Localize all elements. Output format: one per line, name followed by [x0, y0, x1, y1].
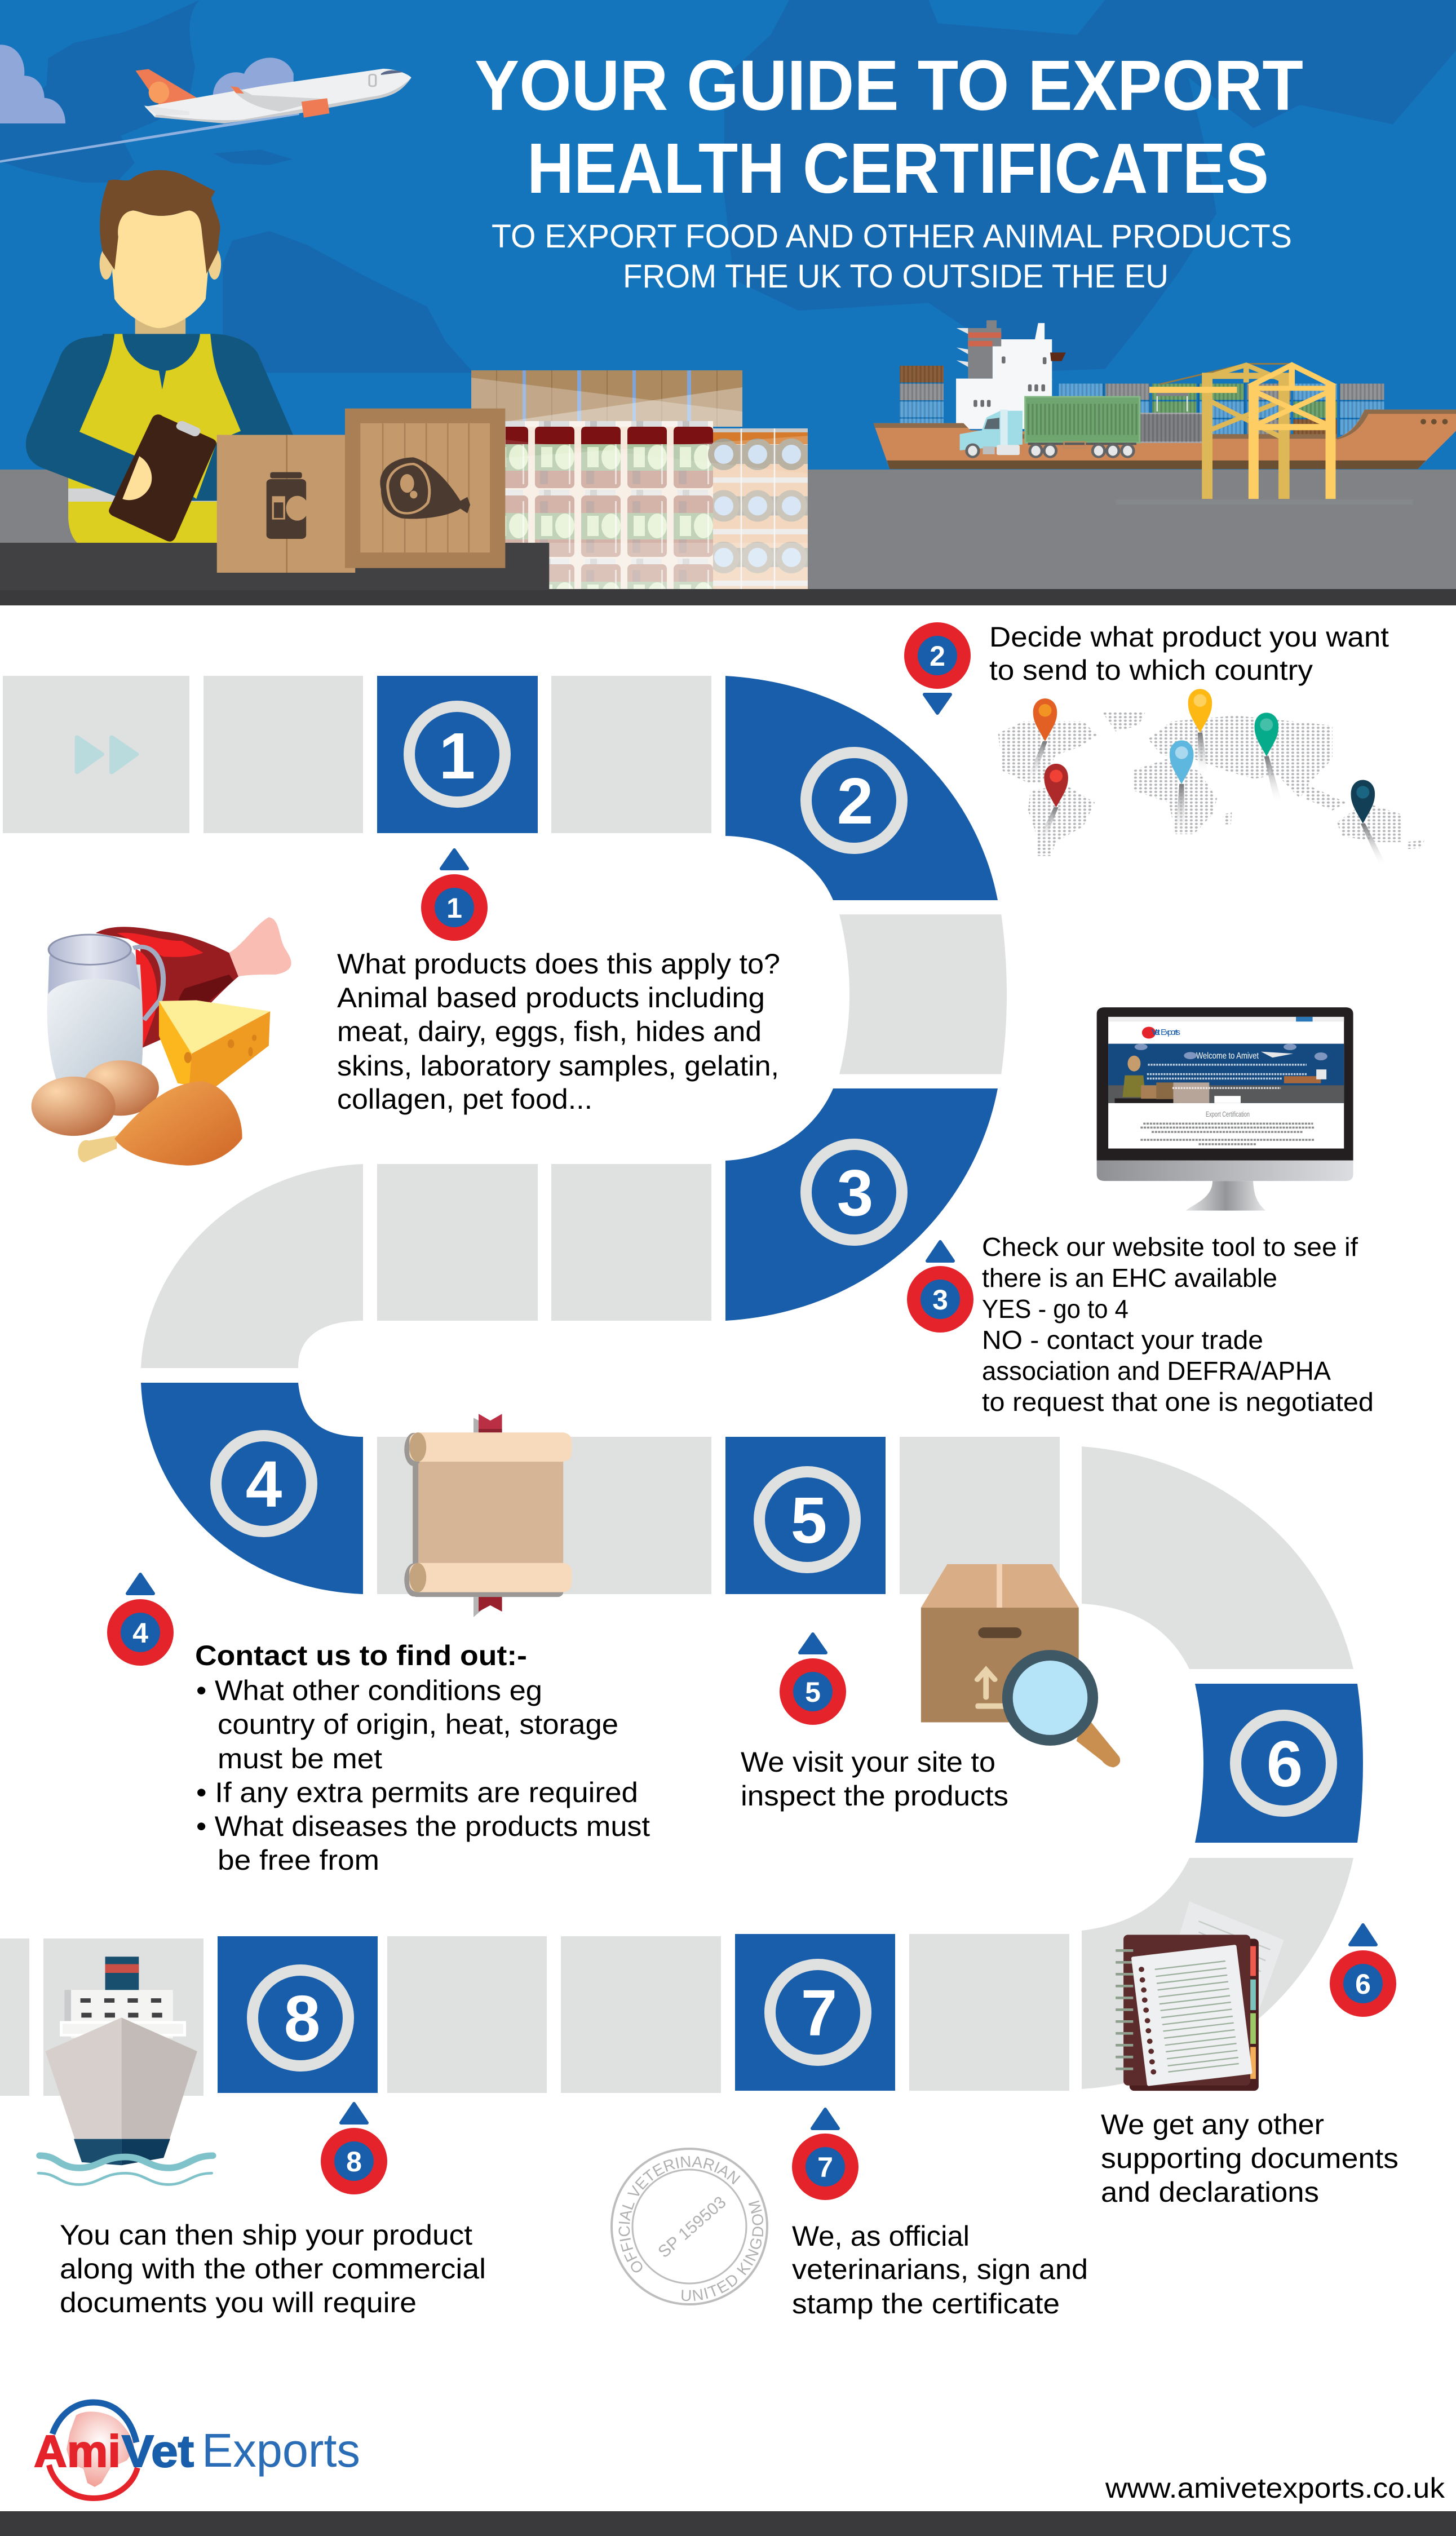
step 6: badge: 6	[1355, 1968, 1371, 2000]
step 3: website on monitor: Vet	[1152, 1028, 1160, 1037]
step 2: text	[989, 621, 1389, 686]
step 1: text	[337, 948, 780, 1115]
step 8: text: along with the other commercial	[60, 2253, 486, 2285]
lower right curve tile	[1082, 1858, 1353, 2089]
world map background	[0, 0, 1456, 373]
step 4: scroll icon	[404, 1414, 572, 1617]
step 7: official veterinarian stamp: OFFICIAL VETERINARIAN	[619, 2156, 741, 2273]
website address: www.amivetexports.co.uk	[1105, 2472, 1445, 2504]
logo globe	[67, 2411, 134, 2487]
map pin: red	[1044, 764, 1068, 807]
tile 5	[725, 1437, 886, 1594]
curve connector tile	[839, 914, 1007, 1074]
step 1: text: Animal based products including	[337, 982, 765, 1013]
step 5: text: inspect the products	[741, 1780, 1008, 1812]
tile 8	[218, 1936, 378, 2093]
tile 1: 1	[439, 719, 475, 793]
snakes and ladders style path	[0, 676, 1363, 2096]
tile 5: 5	[791, 1484, 827, 1557]
step 1: badge: 1	[446, 892, 462, 924]
step 5: text	[741, 1746, 1008, 1812]
counter	[0, 543, 549, 590]
step 8: cruise ship on waves	[38, 1957, 213, 2184]
step 6: text: We get any other	[1101, 2109, 1324, 2140]
map pin: teal	[1351, 780, 1375, 824]
truck with container	[960, 397, 1209, 457]
map pin: green	[1254, 712, 1278, 756]
step 1: badge	[421, 850, 488, 941]
curve tile 4: 4	[246, 1448, 282, 1521]
step 4: badge: 4	[132, 1617, 148, 1649]
step 3: text	[982, 1232, 1374, 1417]
curve tile 4	[141, 1383, 363, 1594]
step 3: website on monitor: Welcome to Amivet	[1196, 1051, 1259, 1061]
clouds	[0, 45, 294, 123]
yellow dock crane	[1116, 364, 1413, 504]
step 2: badge	[904, 622, 971, 713]
curve tile 2	[725, 676, 998, 900]
step 4: badge	[107, 1574, 174, 1666]
step 7: text: We, as official	[792, 2220, 970, 2252]
step 3: website on monitor: Export Certification	[1206, 1110, 1250, 1118]
AmiVet Exports logo: Ami	[34, 2426, 121, 2476]
AmiVet Exports logo: Exports	[202, 2424, 360, 2477]
step 5: badge: 5	[805, 1676, 821, 1708]
step 8: text	[60, 2219, 486, 2318]
step 5: badge	[780, 1634, 846, 1725]
curve tile 3	[725, 1088, 998, 1321]
step 4: text: • What other conditions eg	[196, 1675, 542, 1706]
step 4: text: • If any extra permits are required	[196, 1777, 638, 1808]
step 3: website on monitor	[1097, 1007, 1353, 1211]
crate with ham icon	[345, 409, 505, 568]
jars	[505, 421, 713, 589]
quayside ground	[0, 470, 1456, 590]
step 7: text	[792, 2220, 1088, 2320]
step 8: text: documents you will require	[60, 2287, 417, 2318]
row 1 tiles	[3, 676, 711, 833]
step 4: text: be free from	[218, 1844, 379, 1876]
crate with jar icon	[217, 435, 355, 573]
step 8: text: You can then ship your product	[60, 2219, 472, 2251]
step 4: text: Contact us to find out:-	[195, 1640, 527, 1671]
airplane with contrail	[0, 69, 411, 163]
logo swoosh arcs	[49, 2402, 138, 2498]
AmiVet Exports logo	[34, 2402, 360, 2498]
subtitle: FROM THE UK TO OUTSIDE THE EU	[623, 258, 1169, 295]
step 2: badge: 2	[930, 640, 945, 672]
step 1: food illustration	[32, 917, 291, 1166]
step 6: text	[1101, 2109, 1399, 2208]
footer band	[0, 2511, 1456, 2536]
pallet of wrapped jars and cans	[471, 370, 808, 589]
step 7: official veterinarian stamp: SP 159503	[654, 2193, 730, 2261]
title: HEALTH CERTIFICATES	[527, 129, 1269, 208]
step 3: text: Check our website tool to see if	[982, 1232, 1358, 1262]
step 3: badge	[907, 1242, 973, 1333]
step 7: text: stamp the certificate	[792, 2288, 1060, 2320]
step 3: text: NO - contact your trade	[982, 1325, 1263, 1355]
step 4: text: country of origin, heat, storage	[218, 1709, 618, 1740]
AmiVet Exports logo: Vet	[122, 2426, 194, 2476]
step 8: badge: 8	[346, 2146, 362, 2177]
clear stretch wrap	[471, 378, 808, 589]
step 6: text: and declarations	[1101, 2176, 1319, 2208]
step 3: text: association and DEFRA/APHA	[982, 1356, 1331, 1386]
subtitle: TO EXPORT FOOD AND OTHER ANIMAL PRODUCTS	[492, 218, 1292, 255]
step 7: official veterinarian stamp: UNITED KINGDOM	[681, 2201, 763, 2301]
row 5 tiles	[0, 1934, 1069, 2096]
map pin: yellow	[1188, 689, 1212, 733]
inspector figure with clipboard	[0, 170, 293, 543]
step 7: official veterinarian stamp	[610, 2148, 768, 2305]
step 3: text: to request that one is negotiated	[982, 1387, 1374, 1417]
stacked cartons on top of pallet	[471, 370, 742, 427]
cans	[711, 428, 808, 589]
cargo ship	[874, 320, 1456, 469]
step 1: text: collagen, pet food...	[337, 1083, 592, 1115]
step 8: badge	[321, 2104, 387, 2194]
step 3: text: there is an EHC available	[982, 1263, 1277, 1293]
step 7: badge: 7	[817, 2152, 833, 2183]
step 7: text: veterinarians, sign and	[792, 2254, 1088, 2285]
upper right curve tile	[1082, 1446, 1353, 1669]
row 3 tiles and curve	[141, 1164, 711, 1368]
curve tile 3: 3	[837, 1156, 873, 1229]
step 4: text: • What diseases the products must	[196, 1811, 650, 1842]
curve tile 2: 2	[837, 764, 873, 838]
step 2: text: Decide what product you want	[989, 621, 1389, 653]
tile 6: 6	[1267, 1727, 1303, 1800]
step 1: text: What products does this apply to?	[337, 948, 780, 980]
tile 6	[1195, 1684, 1363, 1843]
fast forward start icon	[77, 737, 136, 772]
step 4: text	[195, 1640, 650, 1876]
step 1: text: meat, dairy, eggs, fish, hides and	[337, 1016, 762, 1047]
title	[475, 46, 1303, 208]
step 1: text: skins, laboratory samples, gelatin,	[337, 1050, 779, 1082]
step 2: text: to send to which country	[989, 654, 1313, 686]
step 5: cardboard box with magnifier	[921, 1564, 1120, 1767]
step 5: text: We visit your site to	[741, 1746, 995, 1778]
tile 7: 7	[801, 1976, 837, 2050]
header banner	[0, 0, 1456, 605]
step 3: website on monitor: Exports	[1161, 1028, 1180, 1037]
step 3: text: YES - go to 4	[982, 1294, 1128, 1324]
tile 7	[735, 1934, 895, 2091]
step 7: badge	[792, 2109, 858, 2200]
step 4: text: must be met	[218, 1743, 382, 1774]
map pin: light blue	[1170, 740, 1193, 784]
step 6: notebook with loose page	[1116, 1901, 1284, 2091]
title: YOUR GUIDE TO EXPORT	[475, 46, 1303, 125]
tile 8: 8	[284, 1982, 320, 2055]
tile 1	[377, 676, 538, 833]
step 3: website on monitor: Ami	[1143, 1028, 1153, 1037]
subtitle	[492, 218, 1292, 295]
step 6: badge	[1330, 1925, 1396, 2017]
step 2: dotted world map with pins	[998, 689, 1424, 868]
step 3: badge: 3	[932, 1284, 948, 1316]
row 4 tiles	[377, 1437, 1060, 1594]
map pin: orange	[1033, 698, 1057, 741]
step 6: text: supporting documents	[1101, 2143, 1399, 2174]
